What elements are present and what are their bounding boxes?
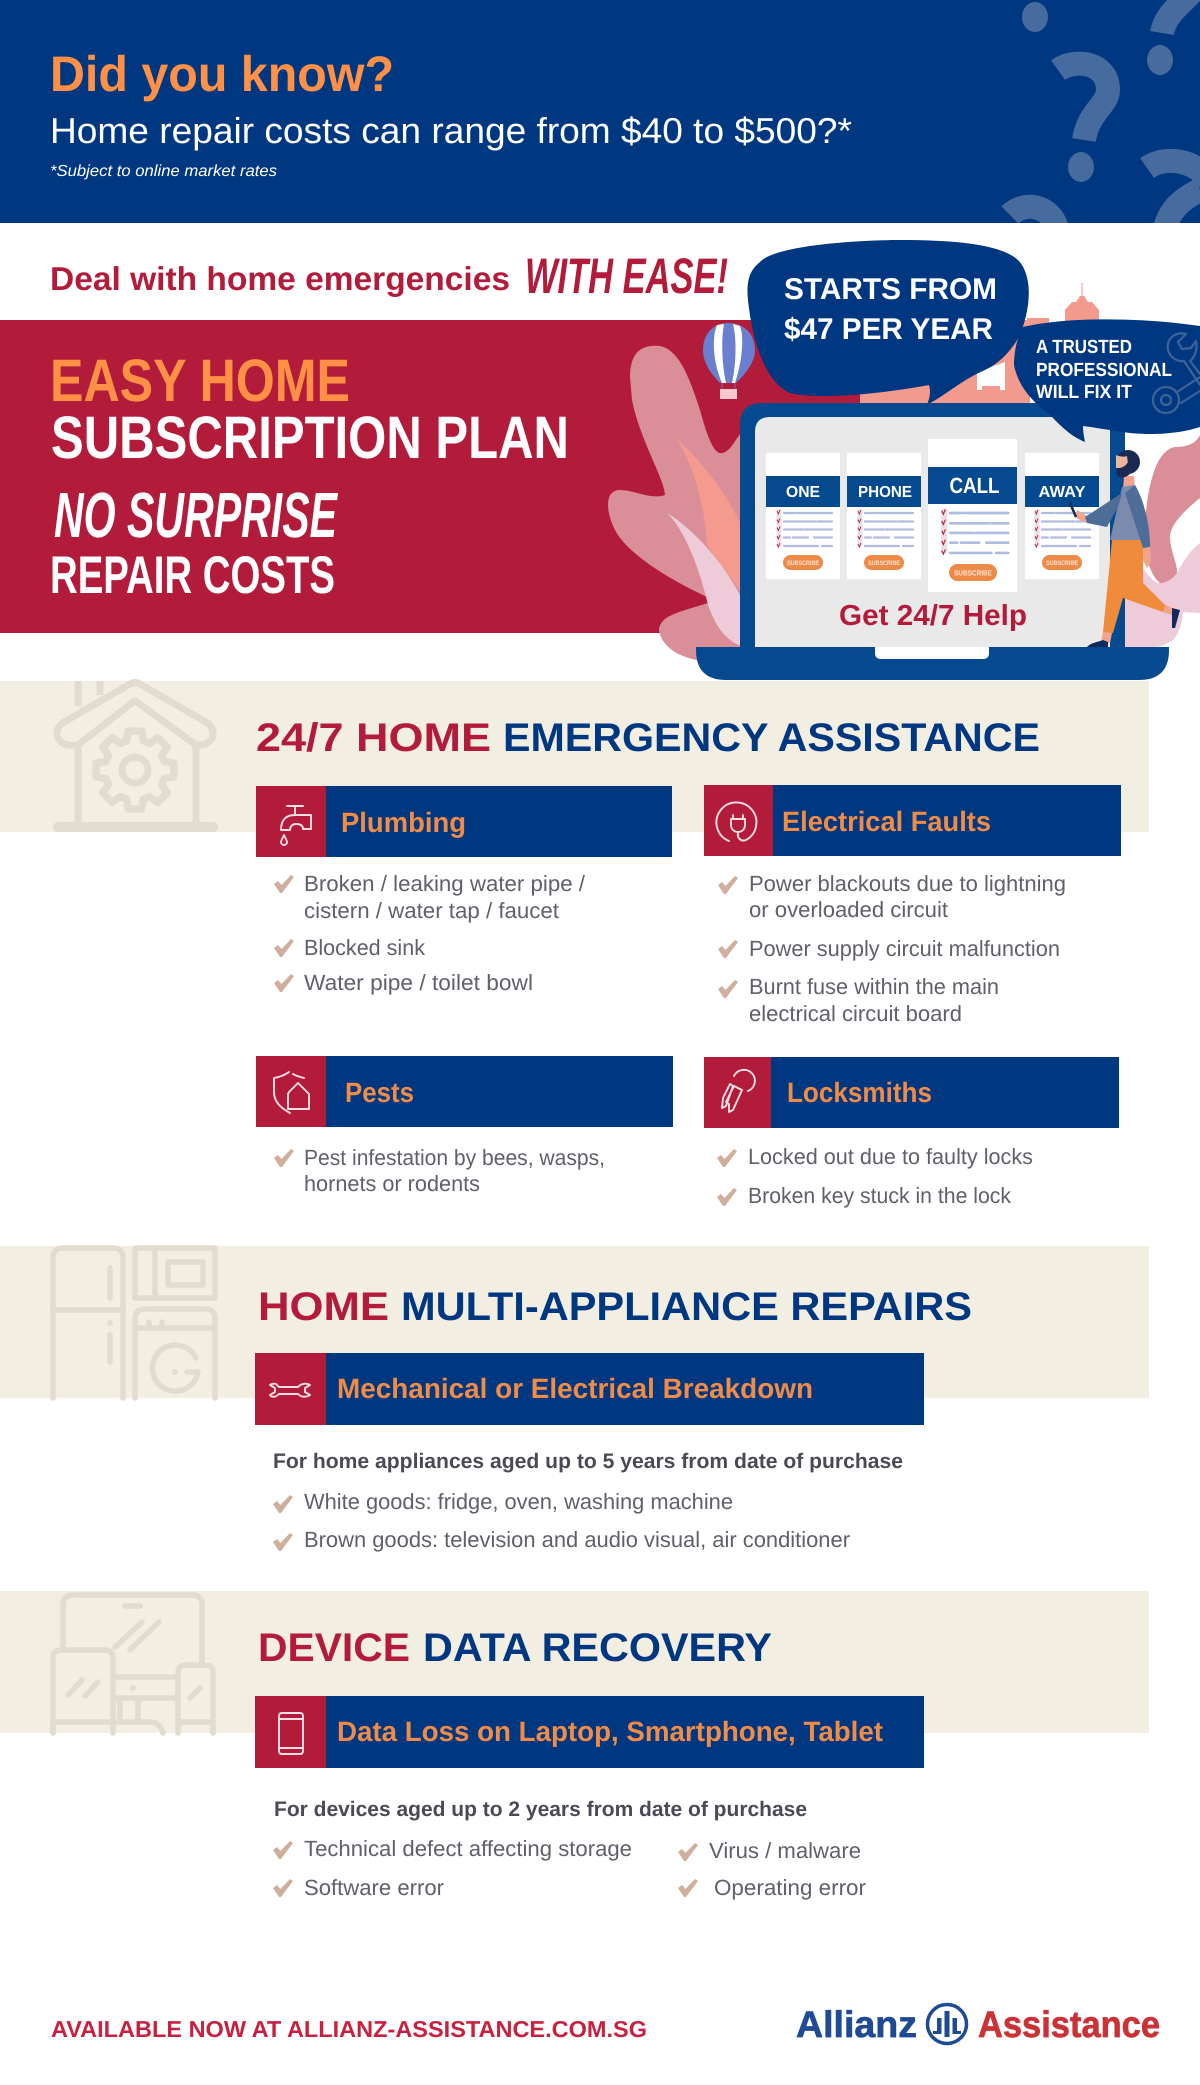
logo: allianz assistance: [796, 2004, 1160, 2045]
heading: did you know: Did you know?: [50, 46, 394, 102]
text: no surprise repair costs: REPAIR COSTS: [50, 546, 335, 605]
panel: pests: [256, 1056, 673, 1196]
icon: appliances: [53, 1248, 215, 1398]
callout: starts from $47 per year: STARTS FROM: [784, 273, 997, 306]
heading: deal with home emergencies: [50, 248, 728, 304]
card: phone: SUBSCRIBE: [868, 560, 901, 567]
list: locksmith items: Locked out due to faulty locks: [748, 1144, 1033, 1169]
callout: a trusted professional will fix it: [1014, 319, 1200, 442]
card: call: CALL: [950, 473, 1000, 498]
list: appliance items: Brown goods: television and audio visual, air conditioner: [304, 1527, 850, 1552]
card: call: SUBSCRIBE: [954, 568, 992, 578]
list: electrical items: electrical circuit board: [749, 1001, 962, 1026]
heading: device data recovery: [258, 1626, 772, 1670]
heading: 24/7 home emergency assistance: EMERGENCY ASSISTANCE: [503, 716, 1040, 760]
callout: a trusted professional will fix it: WILL FIX IT: [1036, 382, 1132, 403]
label: data loss on laptop, smartphone, tablet: Data Loss on Laptop, Smartphone, Tablet: [337, 1716, 883, 1747]
label: mechanical or electrical breakdown: Mechanical or Electrical Breakdown: [337, 1373, 813, 1404]
icon: keys: [722, 1070, 755, 1112]
card: away: AWAY: [1038, 484, 1086, 501]
card: one: ONE: [786, 484, 820, 501]
callout: a trusted professional will fix it: PROFESSIONAL: [1036, 360, 1172, 381]
list: electrical items: [718, 871, 1066, 1026]
panel: data loss: [255, 1696, 924, 1900]
title: easy home subscription plan: SUBSCRIPTION PLAN: [51, 404, 569, 471]
text: available now url: AVAILABLE NOW AT ALLIANZ-ASSISTANCE.COM.SG: [51, 2016, 647, 2042]
text: device age note: For devices aged up to 2 years from date of purchase: [274, 1798, 807, 1821]
panel: mechanical or electrical breakdown: [255, 1353, 924, 1552]
card: away: [1025, 453, 1099, 579]
heading: 24/7 home emergency assistance: [256, 716, 1040, 760]
icon: devices: [53, 1595, 213, 1733]
list: electrical items: Power supply circuit malfunction: [749, 936, 1060, 961]
heading: deal with home emergencies: Deal with home emergencies: [50, 260, 510, 297]
list: pests items: hornets or rodents: [304, 1171, 480, 1196]
heading: device data recovery: DATA RECOVERY: [423, 1626, 772, 1670]
logo: allianz assistance: Allianz: [796, 2004, 917, 2045]
panel: device data recovery: [0, 1591, 1149, 1733]
icon: question marks: [1010, 0, 1200, 235]
card: one: SUBSCRIBE: [787, 560, 820, 567]
callout: starts from $47 per year: [748, 240, 1029, 405]
title: easy home subscription plan: [50, 347, 569, 471]
list: plumbing items: Blocked sink: [304, 935, 426, 960]
list: device items right: Virus / malware: [709, 1838, 861, 1863]
label: electrical faults: Electrical Faults: [782, 806, 991, 837]
illustration: laptop: [696, 403, 1169, 680]
title: easy home subscription plan: EASY HOME: [50, 347, 350, 414]
text: no surprise repair costs: [50, 479, 338, 605]
logo: allianz assistance: Assistance: [978, 2004, 1160, 2045]
card: away: SUBSCRIBE: [1046, 560, 1079, 567]
text: repair cost range: Home repair costs can range from $40 to $500?*: [50, 110, 852, 151]
icon: shield and house: [274, 1072, 309, 1113]
list: plumbing items: Water pipe / toilet bowl: [304, 970, 533, 995]
icon: house with gear: [57, 681, 213, 827]
label: locksmiths: Locksmiths: [787, 1077, 932, 1108]
illustration: right leaves: [1125, 435, 1200, 647]
card: call: [928, 439, 1017, 592]
panel: hero: [0, 240, 1200, 680]
heading: home multi-appliance repairs: HOME: [258, 1285, 389, 1329]
illustration: left leaves: [608, 346, 741, 660]
list: pests items: [274, 1145, 605, 1196]
heading: deal with home emergencies: WITH EASE!: [525, 248, 728, 304]
list: locksmith items: Broken key stuck in the lock: [748, 1183, 1012, 1208]
icon: smartphone: [279, 1713, 303, 1754]
list: device items left: Technical defect affecting storage: [304, 1836, 632, 1861]
icon: faucet: [281, 806, 311, 845]
panel: plumbing: [256, 786, 672, 995]
list: device items left: [273, 1836, 632, 1900]
list: appliance items: White goods: fridge, oven, washing machine: [304, 1489, 733, 1514]
list: plumbing items: [274, 871, 586, 995]
card: phone: PHONE: [858, 484, 912, 501]
icon: hot air balloon: [703, 323, 755, 399]
list: device items right: [678, 1838, 866, 1900]
icon: plug: [716, 802, 756, 841]
list: device items left: Software error: [304, 1875, 444, 1900]
panel: top banner: [0, 0, 1200, 235]
text: footnote: *Subject to online market rates: [50, 163, 277, 180]
panel: locksmiths: [704, 1057, 1119, 1208]
label: pests: Pests: [345, 1077, 414, 1108]
heading: device data recovery: DEVICE: [258, 1626, 410, 1670]
callout: a trusted professional will fix it: A TRUSTED: [1036, 337, 1132, 358]
panel: 24/7 home emergency assistance: [0, 681, 1149, 832]
icon: wrenches: [1153, 333, 1200, 413]
illustration: man with phone: [1070, 450, 1180, 647]
list: electrical items: Burnt fuse within the main: [749, 974, 999, 999]
card: one: [766, 453, 840, 579]
list: appliance items: [273, 1489, 850, 1552]
heading: 24/7 home emergency assistance: 24/7 HOME: [256, 716, 491, 760]
panel: electrical faults: [704, 785, 1121, 1026]
list: electrical items: Power blackouts due to lightning: [749, 871, 1066, 896]
callout: starts from $47 per year: $47 PER YEAR: [784, 313, 993, 346]
card: phone: [847, 453, 921, 579]
list: plumbing items: Broken / leaking water pipe /: [304, 871, 586, 896]
illustration: city buildings: [860, 283, 1099, 410]
icon: wrench: [270, 1384, 310, 1397]
list: electrical items: or overloaded circuit: [749, 897, 948, 922]
text: appliance age note: For home appliances aged up to 5 years from date of purchase: [273, 1450, 903, 1473]
list: plumbing items: cistern / water tap / faucet: [304, 898, 559, 923]
list: device items right: Operating error: [714, 1875, 866, 1900]
label: plumbing: Plumbing: [341, 807, 466, 838]
list: pests items: Pest infestation by bees, wasps,: [304, 1145, 605, 1170]
text: no surprise repair costs: NO SURPRISE: [54, 479, 338, 551]
heading: home multi-appliance repairs: MULTI-APPLIANCE REPAIRS: [401, 1285, 972, 1329]
panel: home multi-appliance repairs: [0, 1246, 1149, 1398]
list: locksmith items: [717, 1144, 1033, 1208]
text: get 24/7 help: Get 24/7 Help: [839, 600, 1027, 632]
